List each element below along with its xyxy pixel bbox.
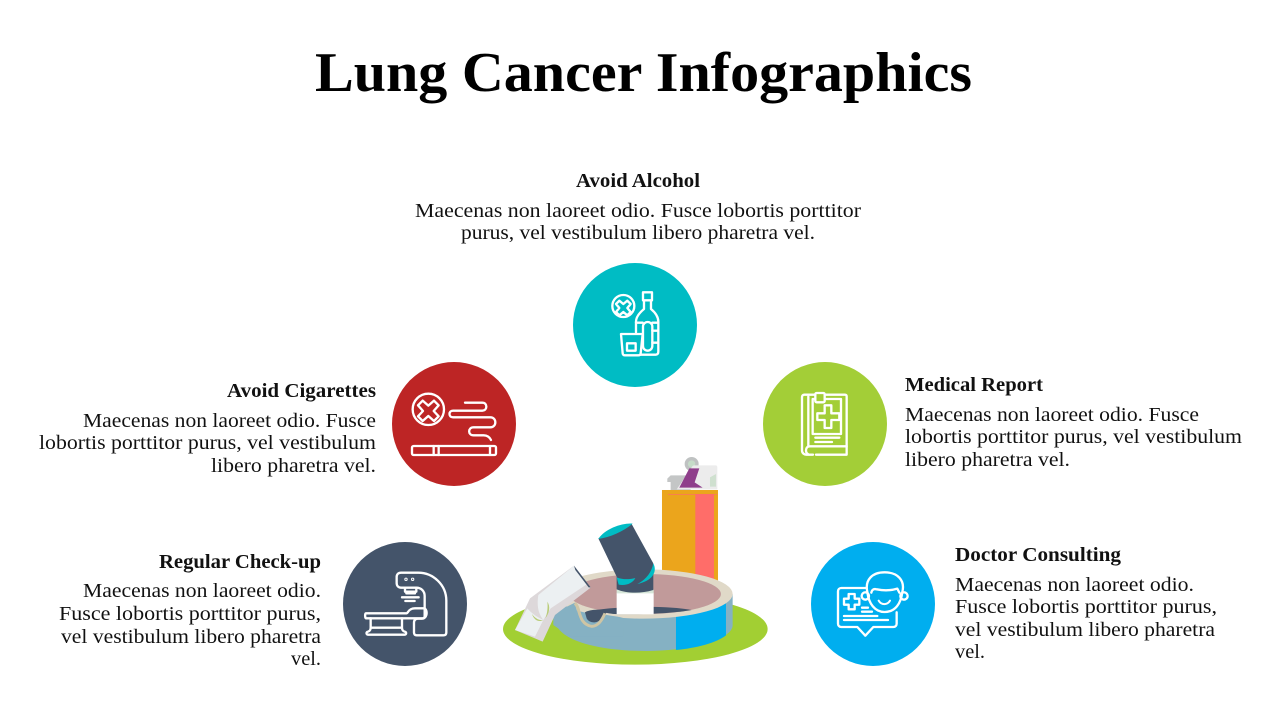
text block: regular check-up: Fusce lobortis porttitor purus,: [59, 603, 321, 625]
text block: doctor consulting: Fusce lobortis porttitor purus,: [955, 596, 1217, 618]
heading: avoid cigarettes: Avoid Cigarettes: [227, 380, 376, 402]
heading: avoid alcohol: Avoid Alcohol: [576, 170, 700, 192]
text block: avoid cigarettes: libero pharetra vel.: [211, 455, 376, 477]
icon: no alcohol: [573, 263, 697, 387]
heading: regular check-up: Regular Check-up: [159, 551, 321, 573]
fallen cigarette: [515, 566, 591, 642]
panel: medical report: [763, 362, 1242, 486]
icon: scanner machine: [343, 542, 467, 666]
text block: avoid cigarettes: Maecenas non laoreet odio. Fusce: [83, 410, 376, 432]
text block: avoid alcohol: [415, 200, 861, 244]
panel: avoid alcohol: [415, 170, 861, 387]
text block: doctor consulting: vel.: [955, 641, 985, 663]
text block: medical report: [905, 404, 1242, 471]
text block: avoid alcohol: purus, vel vestibulum libero pharetra vel.: [461, 222, 815, 244]
ground ellipse: [503, 593, 768, 665]
text block: avoid cigarettes: [39, 410, 376, 477]
text block: medical report: libero pharetra vel.: [905, 449, 1070, 471]
text block: avoid alcohol: Maecenas non laoreet odio. Fusce lobortis porttitor: [415, 200, 861, 222]
upright cigarette: [598, 524, 655, 614]
text block: regular check-up: vel.: [291, 648, 321, 670]
heading: doctor consulting: Doctor Consulting: [955, 544, 1121, 566]
text block: doctor consulting: Maecenas non laoreet odio.: [955, 574, 1194, 596]
ashtray: [553, 569, 733, 651]
panel: regular check-up: [59, 542, 467, 670]
text block: doctor consulting: vel vestibulum libero pharetra: [955, 619, 1215, 641]
text block: regular check-up: [59, 580, 321, 670]
text block: medical report: lobortis porttitor purus, vel vestibulum: [905, 426, 1242, 448]
text block: regular check-up: vel vestibulum libero pharetra: [61, 626, 321, 648]
panel: doctor consulting: [811, 542, 1217, 666]
title: Lung Cancer Infographics: [315, 42, 972, 104]
heading: medical report: Medical Report: [905, 374, 1043, 396]
text block: regular check-up: Maecenas non laoreet odio.: [83, 580, 321, 602]
text block: doctor consulting: [955, 574, 1217, 663]
icon: doctor chat: [811, 542, 935, 666]
icon: medical book: [763, 362, 887, 486]
panel: avoid cigarettes: [39, 362, 516, 486]
lighter: [662, 459, 718, 588]
illustration: ashtray with cigarettes and lighter: [503, 459, 768, 665]
text block: medical report: Maecenas non laoreet odio. Fusce: [905, 404, 1199, 426]
icon: no smoking: [392, 362, 516, 486]
text block: avoid cigarettes: lobortis porttitor purus, vel vestibulum: [39, 432, 376, 454]
